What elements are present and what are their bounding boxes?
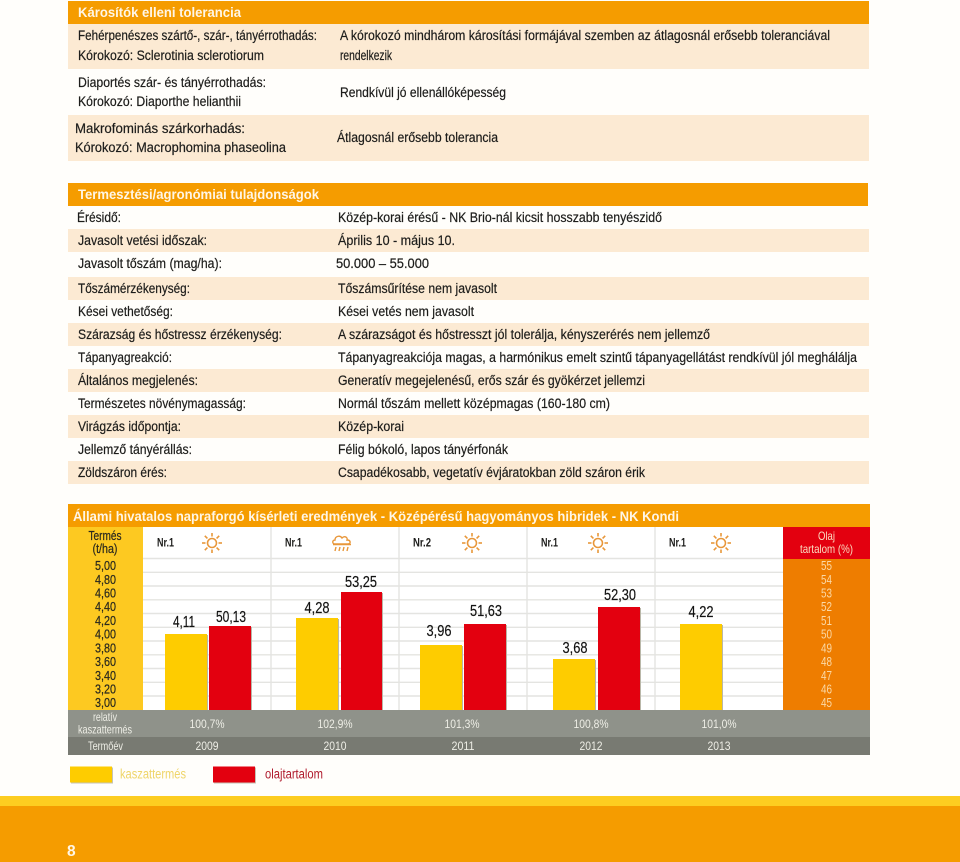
property labels: Javasolt vetési időszak: (78, 233, 207, 248)
bars 2013: 4,22 (688, 604, 714, 621)
right axis: oil content: 50 (821, 628, 832, 642)
ranks: Nr.1 (541, 536, 558, 550)
crop year row: Termőév (88, 739, 123, 753)
legend: olajtartalom (265, 766, 323, 782)
row: macrophomina: Makrofominás szárkorhadás: (75, 121, 245, 136)
bars 2012: 52,30 (604, 587, 636, 604)
right axis: oil content: Olaj (818, 529, 835, 543)
right axis: oil content (783, 527, 870, 710)
crop year row: 2013 (708, 739, 731, 753)
heading: agronomic properties: Termesztési/agronómiai tulajdonságok (78, 186, 319, 202)
row: sclerotinia (78, 28, 830, 63)
crop year row: 2010 (324, 739, 347, 753)
left axis: yield: 4,80 (95, 573, 116, 587)
heading: pest tolerance: Károsítók elleni tolerancia (78, 4, 241, 20)
right axis: oil content: 49 (821, 642, 832, 656)
left axis: yield: Termés (88, 529, 122, 543)
right axis: oil content: 55 (821, 559, 832, 573)
bars 2011 (420, 603, 507, 711)
right axis: oil content: 52 (821, 600, 832, 614)
row: diaporthe (78, 75, 506, 109)
bars 2010 (296, 574, 383, 711)
relative yield row: kaszattermés (78, 722, 132, 736)
ranks: Nr.1 (285, 536, 302, 550)
footer band (0, 796, 960, 862)
row: diaporthe: Rendkívül jó ellenállóképesség (340, 85, 506, 100)
bars 2010: 4,28 (304, 600, 330, 617)
right axis: oil content: 48 (821, 655, 832, 669)
property labels: Virágzás időpontja: (78, 419, 181, 434)
property labels: Általános megjelenés: (78, 373, 198, 388)
property values: Április 10 - május 10. (338, 233, 455, 248)
bars 2013 (680, 604, 723, 711)
row: sclerotinia: A kórokozó mindhárom károsítási formájával szemben az átlagosnál erősebb toleranciával (340, 28, 830, 43)
relative yield row: relatív (93, 710, 117, 724)
property values: Kései vetés nem javasolt (338, 304, 474, 319)
property labels: Tőszámérzékenység: (78, 281, 190, 296)
ranks: Nr.1 (157, 536, 174, 550)
relative yield row: 102,9% (318, 717, 353, 731)
bars 2009: 50,13 (216, 609, 246, 626)
relative yield row: 101,3% (444, 717, 480, 731)
icon: sun 2012 (588, 533, 608, 553)
relative yield row (68, 710, 870, 737)
ranks: Nr.2 (413, 536, 431, 550)
row: diaporthe: Kórokozó: Diaporthe helianthii (78, 94, 241, 109)
ranks: Nr.1 (669, 536, 686, 550)
property values: Tőszámsűrítése nem javasolt (338, 281, 497, 296)
page number: 8 (67, 843, 76, 860)
row: diaporthe: Diaportés szár- és tányérrothadás: (78, 75, 266, 90)
bars 2011: 51,63 (470, 603, 502, 620)
panel: agronomic properties (68, 183, 869, 484)
relative yield row: 100,7% (190, 717, 225, 731)
right axis: oil content: 45 (821, 696, 832, 710)
left axis: yield: (t/ha) (92, 542, 118, 556)
relative yield row: 101,0% (702, 717, 737, 731)
right axis: oil content: tartalom (%) (800, 542, 853, 556)
ranks (157, 536, 686, 550)
crop year row (68, 737, 870, 755)
property labels: Érésidő: (77, 210, 121, 225)
bars 2012 (553, 587, 641, 711)
panel: trial results chart (68, 504, 870, 755)
bars 2009: 4,11 (173, 614, 195, 631)
property labels: Javasolt tőszám (mag/ha): (78, 256, 222, 271)
property labels: Természetes növénymagasság: (78, 396, 246, 411)
row: sclerotinia: Fehérpenészes szártő-, szár-, tányérrothadás: (78, 28, 317, 43)
property values: Normál tőszám mellett középmagas (160-180 cm) (338, 396, 610, 411)
property labels: Kései vethetőség: (78, 304, 173, 319)
row: macrophomina: Kórokozó: Macrophomina phaseolina (75, 140, 286, 155)
right axis: oil content: 51 (821, 614, 832, 628)
row: macrophomina (75, 121, 498, 155)
property labels: Tápanyagreakció: (78, 350, 172, 365)
right axis: oil content: 47 (821, 669, 832, 683)
crop year row: 2011 (452, 739, 475, 753)
left axis: yield: 3,40 (95, 669, 116, 683)
relative yield row: 100,8% (574, 717, 609, 731)
bars 2010: 53,25 (345, 574, 377, 591)
bars 2012: 3,68 (562, 640, 588, 657)
left axis: yield: 4,00 (95, 628, 116, 642)
chart heading (68, 504, 870, 527)
property values: Közép-korai érésű - NK Brio-nál kicsit hosszabb tenyészidő (338, 210, 662, 225)
icon: sun 2009 (202, 533, 222, 553)
row: macrophomina: Átlagosnál erősebb tolerancia (337, 130, 498, 145)
left axis: yield: 3,80 (95, 642, 116, 656)
property values: 50.000 – 55.000 (336, 256, 429, 271)
property labels: Jellemző tányérállás: (78, 442, 192, 457)
row: sclerotinia: rendelkezik (340, 48, 392, 63)
right axis: oil content: 53 (821, 586, 832, 600)
property values: Félig bókoló, lapos tányérfonák (338, 442, 508, 457)
chart heading: Állami hivatalos napraforgó kísérleti eredmények - Középérésű hagyományos hibridek - NK Kondi (73, 508, 679, 524)
property values: Tápanyagreakciója magas, a harmónikus emelt szintű tápanyagellátást rendkívül jól meghálálja (338, 350, 857, 365)
bars 2011: 3,96 (426, 623, 452, 640)
left axis: yield: 4,40 (95, 600, 116, 614)
legend (70, 766, 323, 784)
left axis: yield (68, 527, 143, 710)
icon: sun 2013 (711, 533, 731, 553)
icon: sun 2011 (462, 533, 482, 553)
property values: A szárazságot és hőstresszt jól tolerálja, kényszerérés nem jellemző (338, 327, 710, 342)
crop year row: 2009 (196, 739, 219, 753)
row: sclerotinia: Kórokozó: Sclerotinia sclerotiorum (78, 48, 264, 63)
bars 2009 (165, 609, 252, 711)
right axis: oil content: 54 (821, 573, 832, 587)
left axis: yield: 4,60 (95, 586, 116, 600)
property values: Közép-korai (338, 419, 404, 434)
left axis: yield: 3,00 (95, 696, 116, 710)
left axis: yield: 3,20 (95, 682, 116, 696)
property labels (77, 210, 282, 480)
left axis: yield: 4,20 (95, 614, 116, 628)
legend: kaszattermés (120, 766, 186, 782)
left axis: yield: 3,60 (95, 655, 116, 669)
property labels: Zöldszáron érés: (78, 465, 167, 480)
property values: Csapadékosabb, vegetatív évjáratokban zöld száron érik (338, 465, 645, 480)
icon: rain cloud 2010 (333, 536, 351, 551)
property values: Generatív megejelenésű, erős szár és gyökérzet jellemzi (338, 373, 645, 388)
crop year row: 2012 (580, 739, 603, 753)
property values (336, 210, 857, 480)
property labels: Szárazság és hőstressz érzékenység: (78, 327, 282, 342)
panel: pest tolerance (68, 1, 869, 161)
left axis: yield: 5,00 (95, 559, 116, 573)
right axis: oil content: 46 (821, 682, 832, 696)
